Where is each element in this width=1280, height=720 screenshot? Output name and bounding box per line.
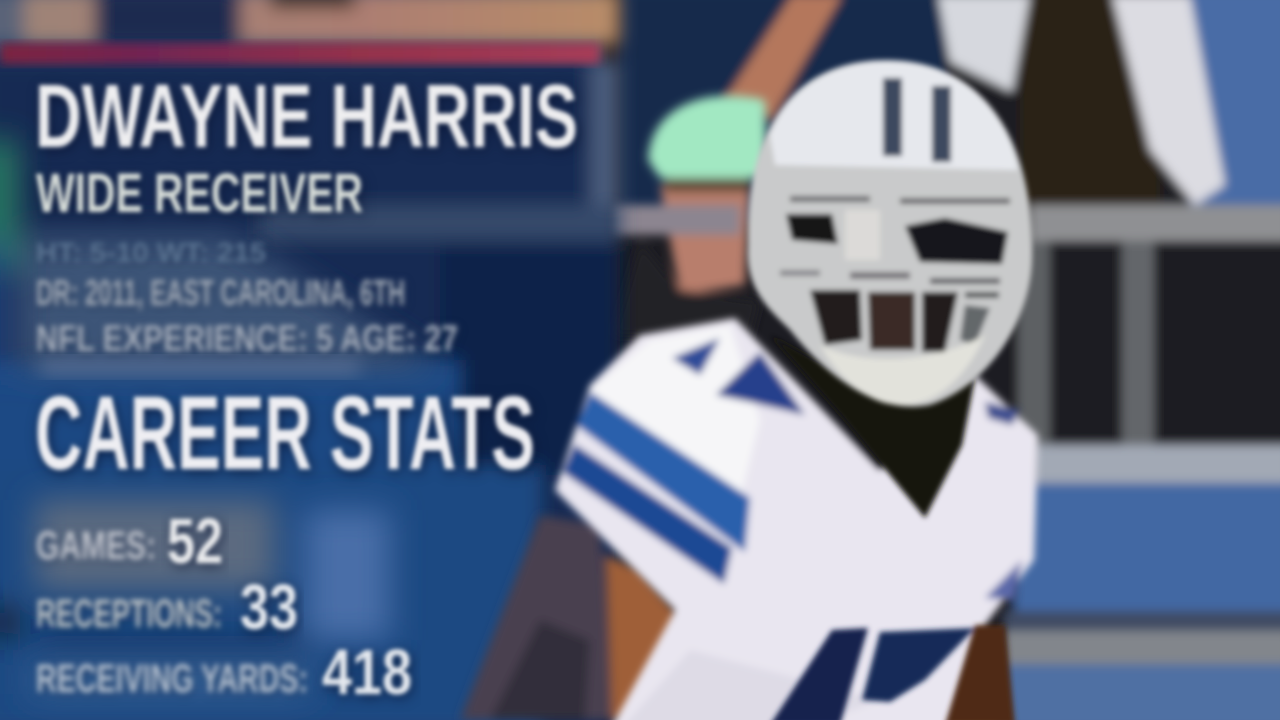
pale band under details xyxy=(40,358,360,376)
background: stands and railings xyxy=(600,0,1280,720)
player: arm xyxy=(460,515,682,720)
jersey shoulder number xyxy=(672,338,1020,425)
stat: receiving yards xyxy=(36,636,412,708)
left panel: translucent navy overlay xyxy=(0,0,620,720)
player: jersey xyxy=(555,318,1038,720)
detail: height and weight: HT: 5-10 WT: 215 xyxy=(36,237,266,268)
stat: receiving yards: RECEIVING YARDS: xyxy=(36,657,308,701)
player: lower arm and jersey number xyxy=(770,625,1015,720)
stat: games: 52 xyxy=(167,505,223,577)
stat: receptions xyxy=(36,571,298,643)
helmet eye openings xyxy=(786,210,1008,264)
stat: receptions: RECEPTIONS: xyxy=(36,592,222,636)
stat: games: GAMES: xyxy=(36,524,156,568)
heading: career stats: CAREER STATS xyxy=(35,375,535,492)
red accent bar xyxy=(0,43,600,64)
jersey sleeve stripes xyxy=(562,392,750,584)
helmet face cage xyxy=(780,196,1010,352)
player: neck xyxy=(770,335,975,518)
subheading: position: WIDE RECEIVER xyxy=(36,161,363,224)
player: helmet xyxy=(748,60,1032,407)
stat: receiving yards: 418 xyxy=(322,636,412,708)
detail: experience and age: NFL EXPERIENCE: 5 AGE: 27 xyxy=(36,318,458,359)
stat: games xyxy=(36,505,223,577)
background: spectator with mint cap xyxy=(610,96,768,340)
player details block xyxy=(35,67,578,359)
heading: player name: DWAYNE HARRIS xyxy=(35,67,578,167)
detail: draft and college: DR: 2011, EAST CAROLINA, 6TH xyxy=(36,272,405,313)
helmet stripes xyxy=(883,78,951,162)
left panel: soft colour patches xyxy=(0,140,440,695)
helmet chin strap xyxy=(820,335,985,405)
stat: receptions: 33 xyxy=(240,571,298,643)
